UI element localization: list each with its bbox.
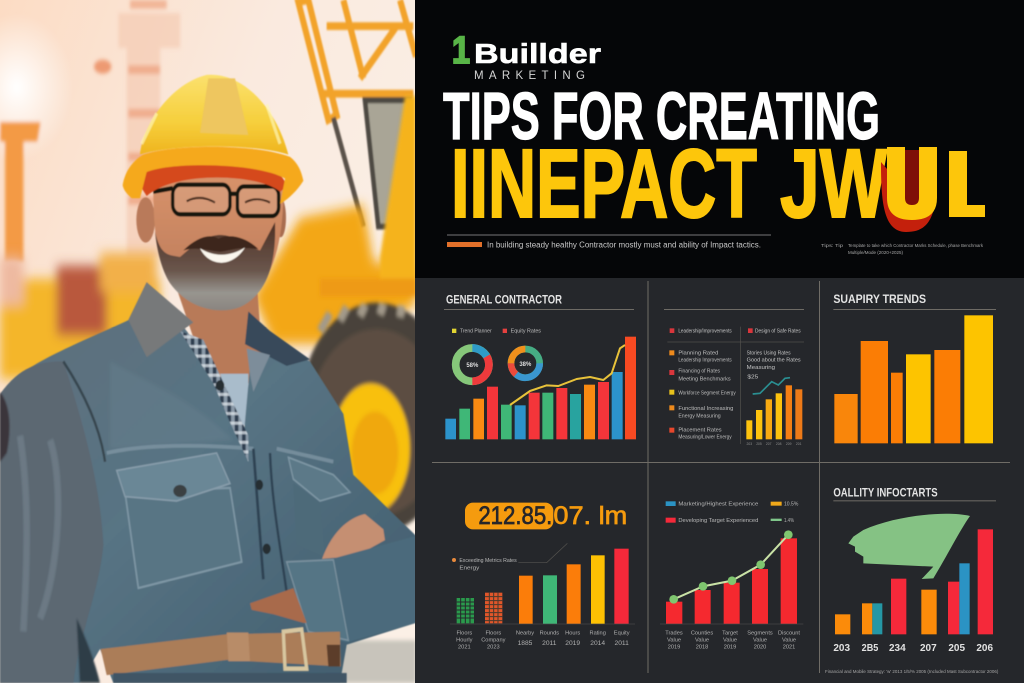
axis labels: Value (723, 637, 737, 643)
legend: Marketing/Highest Experience (678, 502, 758, 508)
axis labels: Value (782, 637, 796, 643)
axis labels: Segments (747, 630, 773, 636)
axis labels: Company (481, 638, 506, 644)
header panel (415, 0, 1024, 278)
photo background: construction site (0, 0, 455, 683)
axis labels: Trades (665, 630, 683, 636)
donut chart 1: 58% (466, 363, 479, 369)
bar chart (660, 538, 803, 624)
mini bar chart (746, 385, 802, 439)
factor list: Meeting Benchmarks (678, 376, 731, 382)
axis labels: 2021 (783, 645, 795, 651)
collar (128, 282, 310, 392)
heading: GENERAL CONTRACTOR (446, 292, 562, 306)
title line 2: JW (780, 129, 887, 238)
title line 2: IINEPACT (451, 129, 757, 238)
factor list: Energy Measuring (678, 413, 721, 419)
legend (666, 501, 798, 524)
trend line with markers (669, 530, 793, 604)
mini chart axis labels: 201 (796, 442, 802, 446)
column headers: Design of Safe Rates (755, 329, 801, 335)
axis labels: Hours (565, 630, 580, 636)
axis labels: 2014 (590, 640, 605, 647)
footnote (821, 243, 984, 255)
year labels: 2B5 (862, 643, 879, 654)
factor list: Functional Increasing (678, 406, 733, 412)
footnote: Tips: Tip (821, 243, 844, 248)
legend: Developing Target Experienced (678, 518, 758, 524)
head (136, 174, 286, 310)
axis labels: 1885 (518, 640, 533, 647)
axis labels (665, 630, 800, 651)
highlighted figure (465, 502, 627, 530)
bar chart (835, 529, 993, 634)
annotation (452, 543, 567, 572)
footnote: Template to take which Contractor Marks Schedule, phase Benchmark (848, 243, 984, 248)
mini chart axis labels: 208 (776, 442, 782, 446)
green callout shape (848, 514, 970, 579)
axis labels: 2019 (668, 645, 680, 651)
year labels: 203 (833, 643, 850, 654)
factor list: Measuring/Lower Energy (678, 435, 732, 441)
axis labels: Rating (589, 630, 606, 636)
legend: 10.5% (784, 502, 798, 508)
bar chart (834, 315, 993, 443)
axis labels: 2018 (696, 645, 708, 651)
highlighted figure: 212.85. (478, 502, 552, 530)
column headers: Leadership/Improvements (678, 329, 732, 335)
factor list: Workforce Segment Energy (678, 391, 736, 397)
logo (452, 30, 601, 82)
factor list (669, 350, 736, 441)
axis labels: Floors (485, 630, 501, 636)
donut chart 2: 38% (519, 362, 532, 368)
axis labels: 2020 (754, 645, 766, 651)
axis labels: 2019 (724, 645, 736, 651)
footnote: Financial and Mobile Strategy: 'w' 2013 1/5/% 2005 (Included Mast Subcontractor 2006) (825, 669, 999, 674)
legend: Equity Rates (511, 329, 541, 335)
mini chart axis labels: 207 (766, 442, 772, 446)
year labels: 234 (889, 643, 906, 654)
axis labels: Floors (456, 630, 472, 636)
photo: smiling construction worker (0, 0, 455, 683)
donut chart 1 (456, 348, 489, 381)
brick blocks (457, 593, 502, 623)
axis labels: Target (722, 630, 738, 636)
axis labels: Equity (614, 630, 630, 636)
factor list: Placement Rates (678, 428, 722, 434)
side note: Stories Using Rates (747, 350, 791, 356)
panel: revenue figure and bars (450, 502, 635, 651)
eyeglasses (153, 185, 279, 216)
side note: Measuring (747, 365, 775, 371)
axis labels: 2021 (458, 645, 471, 651)
annotation: Exceeding Metrics Rates (459, 558, 517, 564)
axis labels: Hourly (456, 638, 473, 644)
panel: growth combo chart (660, 501, 803, 651)
axis labels: 2019 (565, 640, 580, 647)
panel: factors list and mini chart (664, 309, 804, 446)
denim work shirt (0, 282, 416, 683)
axis labels: Value (753, 637, 767, 643)
axis labels: Nearby (516, 630, 534, 636)
legend (452, 329, 541, 335)
beard and moustache (155, 222, 275, 310)
chest pocket right (288, 457, 350, 558)
axis labels: Discount (778, 630, 800, 636)
mini chart axis labels: 205 (756, 442, 762, 446)
mini chart axis labels: 203 (747, 442, 752, 446)
mini chart axis labels: 209 (786, 442, 792, 446)
legend: 1.4% (784, 518, 794, 524)
mini trend line (753, 378, 790, 394)
donut chart 2 (511, 349, 540, 378)
dashboard background (415, 278, 1024, 683)
logo numeral: 1 (452, 30, 470, 72)
axis labels: 2011 (615, 640, 629, 647)
axis labels: Value (695, 637, 709, 643)
footnote: Multiple/Mode (2020+2025) (848, 250, 903, 255)
orange accent bar (447, 242, 482, 247)
side note: $25 (747, 375, 758, 381)
bar chart (450, 549, 635, 624)
subtitle rule (447, 234, 771, 236)
side note: Good about the Rates (747, 358, 801, 364)
mini chart axis labels (747, 442, 802, 446)
chest pocket left (117, 453, 242, 588)
axis labels: Counties (691, 630, 713, 636)
factor list: Planning Rated (678, 350, 718, 356)
bar chart (445, 337, 636, 439)
year labels: 207 (920, 643, 937, 654)
year labels: 206 (976, 643, 993, 654)
subtitle: In building steady healthy Contractor mostly must and ability of Impact tactics. (487, 240, 761, 250)
factor list: Leadership Improvements (678, 357, 732, 363)
panel: supply trends (833, 292, 996, 443)
logo word: Buillder (474, 38, 601, 69)
logo subline: MARKETING (474, 70, 585, 82)
factor list: Financing of Rates (678, 368, 720, 374)
column headers (670, 328, 801, 335)
panel: general contractor (444, 292, 636, 439)
plaid inner placket (180, 331, 248, 462)
highlighted figure: 07. lm (553, 502, 627, 530)
side note (747, 350, 801, 381)
legend: Trend Planner (460, 329, 492, 335)
axis labels: Rounds (540, 630, 559, 636)
annotation: Energy (459, 566, 480, 572)
trend line (510, 345, 625, 405)
wheel (298, 303, 455, 534)
year labels: 205 (948, 643, 965, 654)
heading: OALLITY INFOCTARTS (833, 485, 938, 499)
axis labels (456, 630, 630, 651)
panel: quality infocharts (825, 485, 999, 674)
axis labels: 2011 (542, 640, 557, 647)
worker figure (0, 75, 416, 683)
heading: SUAPIRY TRENDS (833, 292, 926, 306)
yellow hard hat (123, 75, 303, 204)
axis labels: Value (667, 637, 681, 643)
neck and undershirt (173, 279, 263, 436)
leather belt and buckle (101, 629, 341, 675)
axis labels: 2023 (487, 645, 500, 651)
year labels (833, 643, 993, 654)
crossed forearm and hands (250, 514, 416, 643)
